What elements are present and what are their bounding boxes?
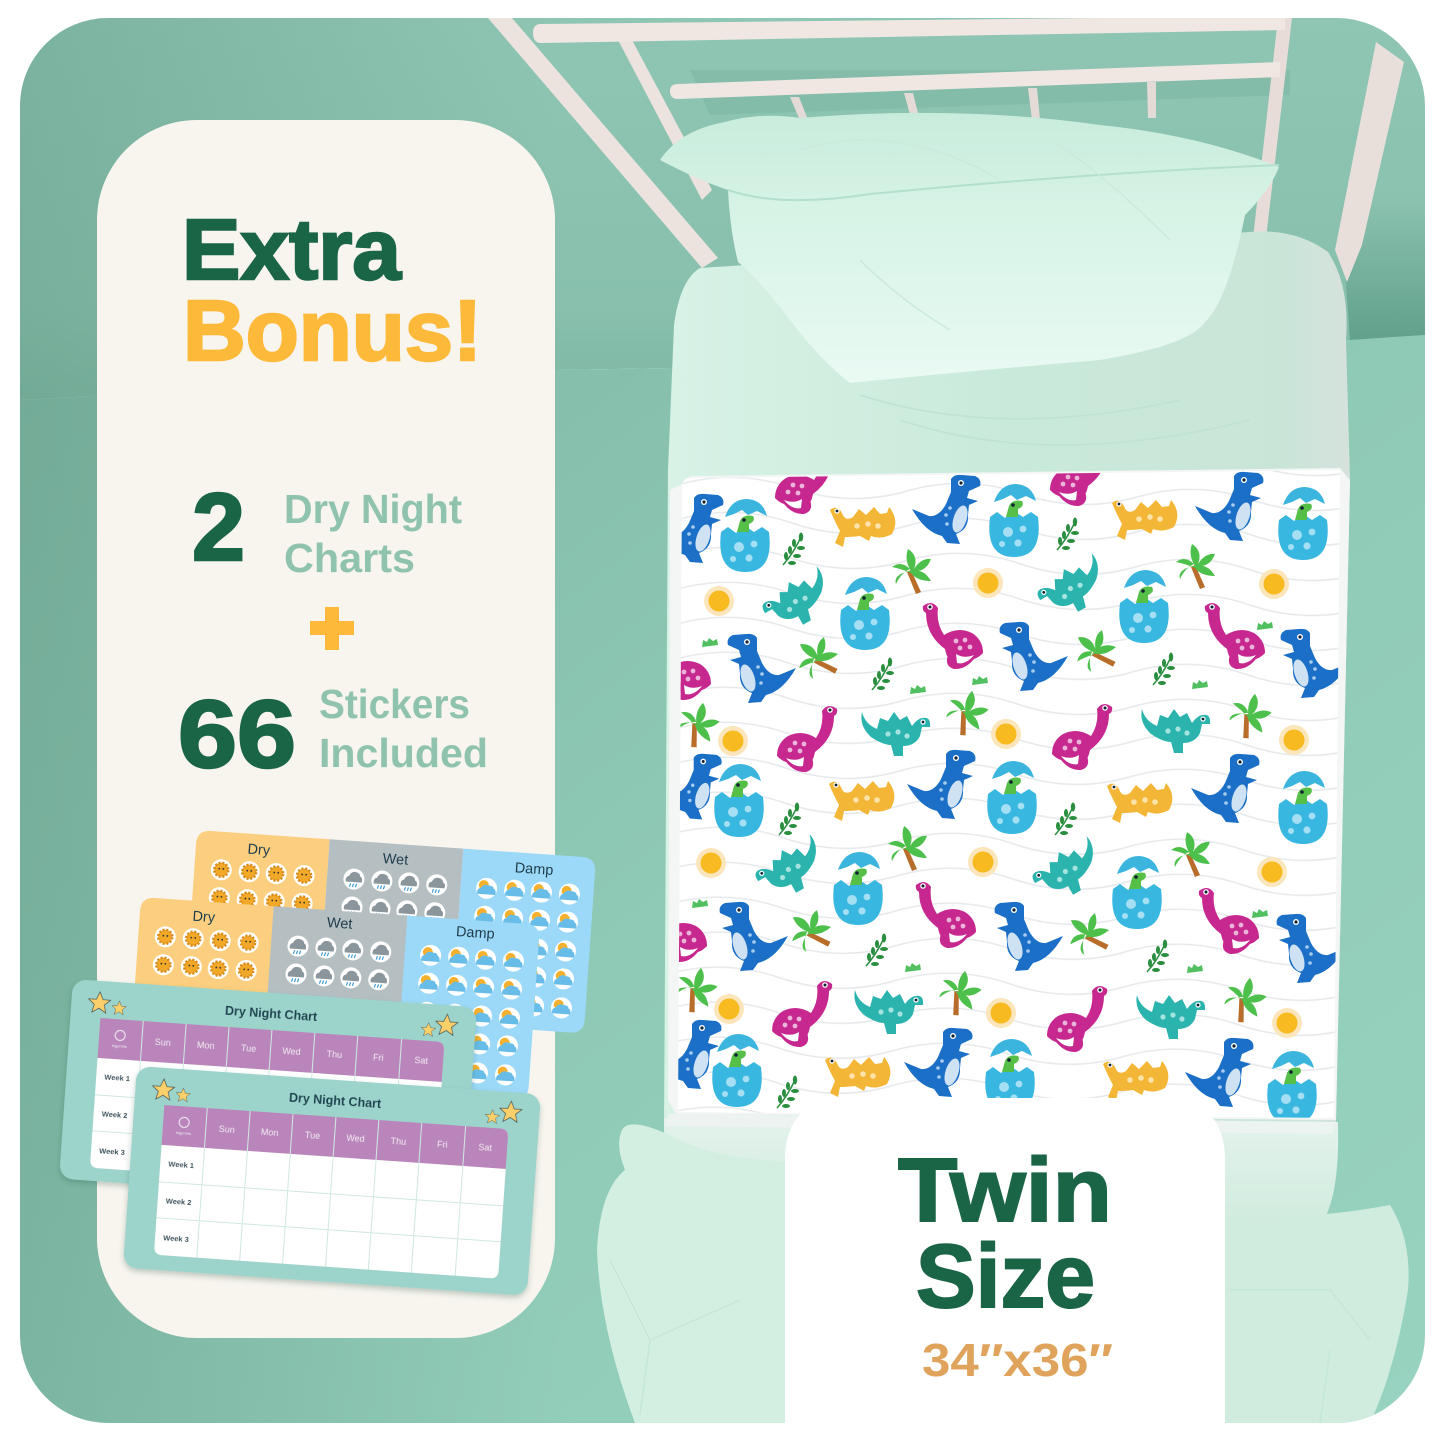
size heading: Size [916, 1227, 1095, 1327]
front dry night chart: Tue [305, 1130, 321, 1141]
floor [20, 335, 1425, 1423]
back dry night chart: Week 2 [101, 1109, 128, 1120]
sheet wrinkles [860, 395, 1250, 445]
panel background [97, 120, 555, 1338]
dry night charts label: Charts [284, 535, 415, 581]
right post [1253, 18, 1292, 238]
back dry night chart: Sat [414, 1055, 429, 1066]
number 66: 66 [178, 681, 296, 788]
card background [785, 1098, 1225, 1423]
lower sheet below pad [664, 1118, 1338, 1225]
fern sprigs [777, 518, 1175, 1108]
size heading: Twin [898, 1141, 1112, 1241]
rolled duvet left [597, 1124, 800, 1423]
back sticker sheet: Wet [382, 851, 409, 869]
back dry night chart: Thu [326, 1049, 342, 1060]
front dry night chart: Dry Night Chart [288, 1091, 382, 1111]
front dry night chart: Sun [218, 1124, 235, 1135]
back dry night chart: Fri [373, 1052, 384, 1063]
back dry night chart: bigprints [112, 1043, 127, 1049]
waterproof pad with dinosaur print [647, 440, 1350, 1124]
back dry night chart: Wed [282, 1046, 301, 1057]
back dry night chart: Week 3 [99, 1146, 125, 1157]
far right post [1335, 42, 1404, 282]
front dry night chart: Wed [346, 1133, 365, 1144]
pad base [668, 468, 1350, 1120]
left side shade [20, 18, 358, 1423]
stickers included label: Included [319, 730, 488, 776]
rolled duvet right [1210, 1205, 1409, 1423]
front sticker sheet: Dry [192, 909, 216, 926]
dry night charts label [284, 486, 462, 581]
back sticker sheet [185, 830, 596, 1033]
back dry night chart: Dry Night Chart [224, 1004, 318, 1024]
wall corner shadow right [1346, 230, 1425, 340]
palm trees [667, 544, 1276, 1028]
front dry night chart: bigprints [176, 1130, 191, 1136]
front dry night chart: Week 1 [168, 1159, 194, 1170]
dry night charts label: Dry Night [284, 486, 462, 532]
panel: bonus [59, 120, 596, 1338]
front sticker sheet: Wet [326, 915, 353, 933]
front dry night chart: Thu [390, 1136, 406, 1147]
front dry night chart [123, 1066, 541, 1296]
back dry night chart: Mon [197, 1040, 215, 1051]
back dry night chart: Tue [241, 1043, 257, 1054]
dimensions: 34″x36″ [922, 1334, 1113, 1386]
back sticker sheet: Dry [247, 842, 271, 859]
wall [20, 18, 1425, 400]
duvet creases [610, 1260, 1370, 1423]
front dry night chart: Mon [261, 1127, 279, 1138]
front dry night chart: Week 2 [165, 1196, 192, 1207]
front dry night chart: Fri [437, 1139, 448, 1150]
pillow [660, 113, 1279, 383]
size heading [898, 1141, 1112, 1327]
headboard [488, 16, 1404, 282]
number 2: 2 [192, 474, 245, 581]
stickers included label [319, 681, 488, 776]
size card [785, 1098, 1225, 1423]
title: Extra [182, 203, 402, 298]
title [182, 203, 482, 379]
plus icon [310, 607, 354, 650]
bed sheet [664, 231, 1350, 1225]
slats [790, 82, 1156, 118]
back dry night chart [59, 979, 477, 1207]
title: Bonus! [183, 284, 482, 379]
top rail [533, 16, 1285, 43]
grass tufts [692, 621, 1273, 973]
lower sheet hem [666, 1114, 1336, 1134]
suns [696, 568, 1309, 1038]
back dry night chart: Sun [154, 1037, 171, 1048]
teal stegosaurus [751, 553, 1210, 1039]
magenta long-neck dinosaurs [647, 440, 1265, 1052]
second rail [670, 62, 1280, 99]
front sticker sheet: Damp [455, 924, 495, 943]
yellow stegosaurus [825, 500, 1177, 1101]
inner post [618, 40, 712, 200]
front dry night chart: Sat [478, 1142, 493, 1153]
stickers included label: Stickers [319, 681, 470, 727]
blue t-rex dinosaurs [653, 472, 1349, 1107]
back sticker sheet: Damp [514, 860, 554, 879]
hatching eggs [712, 484, 1328, 1124]
back dry night chart: Week 1 [104, 1072, 130, 1083]
front dry night chart: Week 3 [163, 1233, 189, 1244]
left post [488, 18, 718, 268]
wall shadow of headboard [690, 70, 1290, 115]
front sticker sheet [129, 897, 540, 1100]
